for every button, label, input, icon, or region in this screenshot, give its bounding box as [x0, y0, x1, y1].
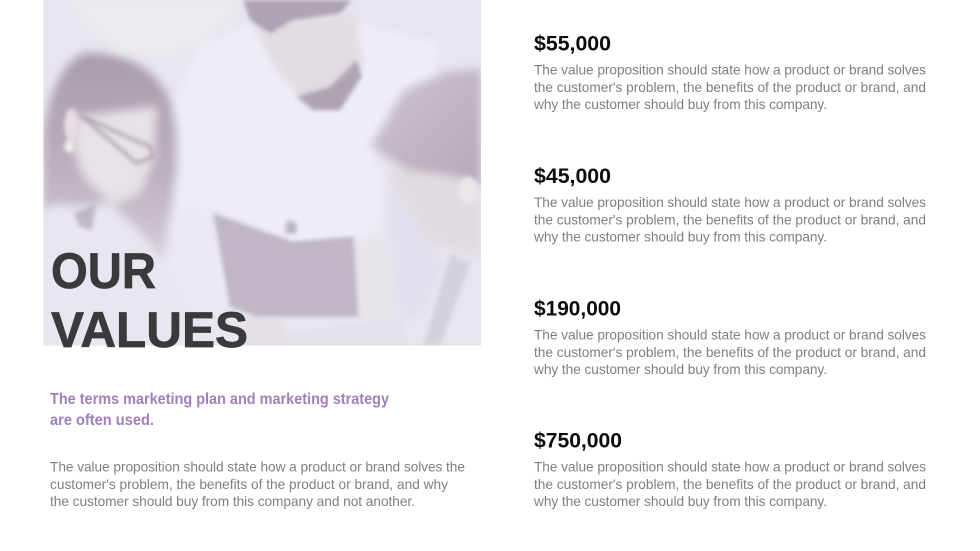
title: OUR [51, 243, 156, 299]
value item: $190,000 [533, 296, 926, 377]
description: The value proposition should state how a product or brand solves [534, 460, 926, 474]
value item: $45,000 [533, 164, 926, 244]
amount: $190,000 [534, 296, 621, 320]
text block: left description: The value proposition should state how a product or brand solves the [50, 460, 465, 474]
description [533, 328, 926, 377]
description [533, 460, 926, 509]
description: The value proposition should state how a product or brand solves [534, 195, 926, 210]
value item: $55,000 [533, 32, 926, 112]
amount: $45,000 [534, 164, 611, 188]
subtitle [50, 391, 389, 429]
description: The value proposition should state how a product or brand solves [534, 328, 926, 342]
text block: left description [50, 460, 465, 509]
description: the customer's problem, the benefits of the product or brand, and [534, 80, 926, 95]
description: why the customer should buy from this company. [533, 362, 827, 377]
description: the customer's problem, the benefits of the product or brand, and [534, 345, 926, 360]
title [51, 243, 248, 358]
subtitle: The terms marketing plan and marketing strategy [50, 391, 389, 408]
subtitle: are often used. [50, 412, 154, 429]
photo: three colleagues with lilac overlay [43, 0, 481, 346]
description [533, 62, 926, 112]
text block: left description: the customer should buy from this company and not another. [50, 494, 415, 509]
text block: left description: customer's problem, the benefits of the product or brand, and why [50, 477, 448, 492]
title: VALUES [51, 302, 248, 358]
description: why the customer should buy from this company. [533, 230, 827, 244]
description: The value proposition should state how a product or brand solves [534, 62, 926, 78]
description: why the customer should buy from this company. [533, 97, 827, 112]
description [533, 195, 926, 244]
description: why the customer should buy from this company. [533, 494, 827, 509]
amount: $750,000 [534, 428, 622, 452]
value item: $750,000 [533, 428, 926, 509]
amount: $55,000 [534, 32, 611, 56]
description: the customer's problem, the benefits of the product or brand, and [534, 477, 926, 492]
description: the customer's problem, the benefits of the product or brand, and [534, 212, 926, 228]
